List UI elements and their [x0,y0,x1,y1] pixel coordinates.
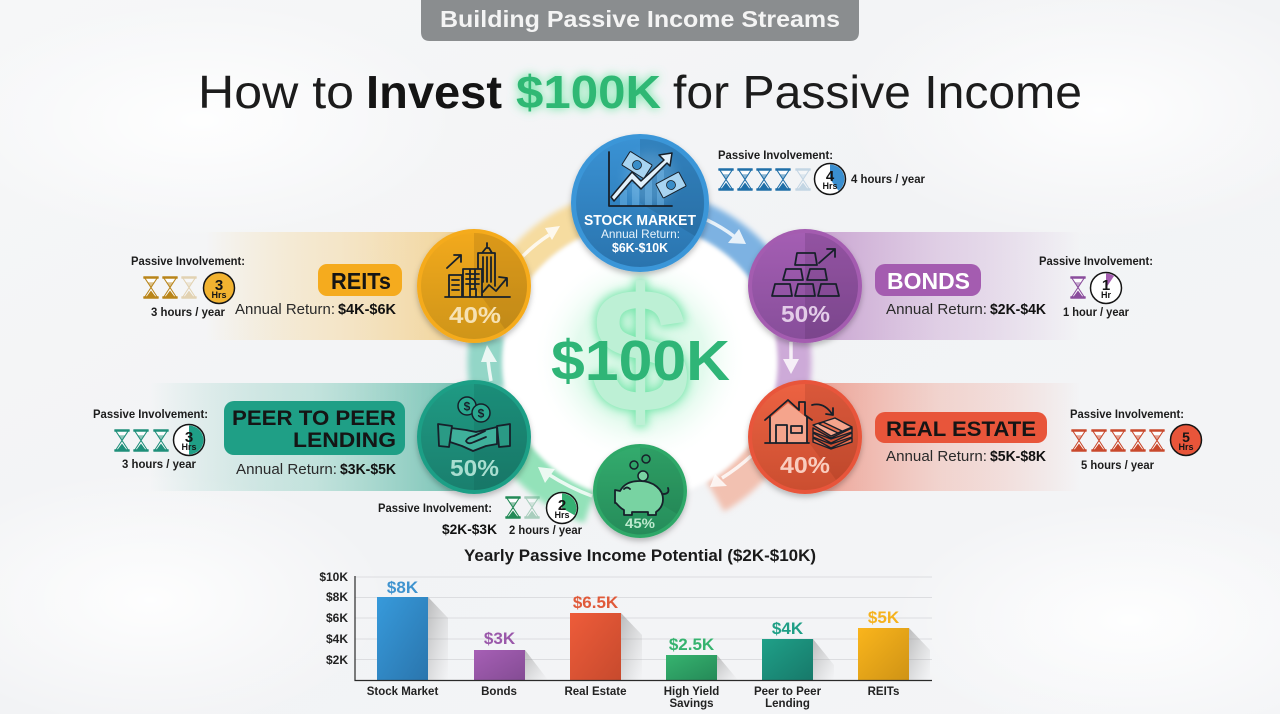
annual return: REITs: Annual Return: [235,301,335,318]
bar chart [319,570,932,710]
title: for Passive Income [673,66,1082,118]
y axis labels: $4K [326,632,348,646]
bar: Bonds $3K [474,629,548,698]
central white disc [503,225,777,499]
badge: REITs: REITs [331,268,391,294]
icon: hourglass [1070,276,1086,299]
title: Invest [366,66,502,118]
bar: Real Estate $6.5K [564,593,642,698]
annual return: bonds: $2K-$4K [990,301,1046,318]
icon: clock 3 hrs [204,272,234,304]
node: High Yield Savings [593,444,687,538]
badge: Peer to Peer Lending [224,401,405,455]
y axis labels: $10K [319,570,348,584]
arrow: peer to peer to REITs [481,345,497,381]
annual return: bonds: Annual Return: [886,301,987,318]
bar: High Yield Savings $2.5K: $2.5K [669,635,715,654]
bar: Peer to Peer Lending $4K [754,619,834,710]
chart title: Yearly Passive Income Potential ($2K-$10K) [464,547,816,565]
icon: handshake with coins [438,397,510,451]
real estate passive involvement [1070,407,1202,472]
icon: piggy bank [615,455,668,515]
annual return: peer to peer [236,461,396,478]
peer to peer text block [224,401,405,478]
stock passive involvement: Passive Involvement: [718,148,833,162]
value: 50%: 50% [450,455,499,481]
y axis labels: $2K [326,653,348,667]
annual return: peer to peer: $3K-$5K [340,461,396,478]
icon: hourglasses [114,429,169,452]
icon: clock 4 hrs: Hrs [822,181,838,191]
icon: clock 1 hr: Hr [1101,290,1111,300]
icon: clock 5 hrs [1170,424,1202,456]
label: stock annual return: Annual Return: [601,227,680,241]
peer to peer passive involvement [93,407,208,471]
arrow: savings to peer to peer [538,467,592,496]
icon: stock chart with banknotes [609,151,686,206]
savings passive involvement: Passive Involvement: [378,501,492,515]
title [198,66,1082,118]
bar: REITs $5K: $5K [868,608,900,627]
flow arrows [481,220,799,496]
value: 45%: 45% [625,515,656,531]
icon: clock 5 hrs: 5 [1182,429,1190,445]
bonds text block [875,264,1046,318]
icon: clock 2 hrs: Hrs [554,510,570,520]
bonds passive involvement [1039,254,1153,319]
value: 40%: 40% [449,302,501,328]
badge: REITs [318,264,402,296]
value: stock annual return: $6K-$10K [612,241,668,255]
badge: Real Estate: REAL ESTATE [886,417,1036,441]
icon: clock 1 hr [1090,272,1122,304]
badge: Peer to Peer Lending: PEER TO PEER [232,406,396,430]
badge: Real Estate [875,412,1047,443]
annual return: REITs: $4K-$6K [338,301,396,318]
bar: Stock Market $8K: Stock Market [367,686,438,698]
bar: Peer to Peer Lending $4K: Lending [765,698,810,710]
y axis labels: $8K [326,590,348,604]
icon: clock 2 hrs: 2 [558,497,566,514]
panel band: Peer to Peer Lending [150,383,475,491]
real estate passive involvement: Passive Involvement: [1070,407,1184,421]
real estate passive involvement: 5 hours / year [1081,458,1154,472]
value: 50%: 50% [781,301,830,327]
bar: Real Estate $6.5K: $6.5K [573,593,619,612]
node: Stock Market [571,134,709,272]
icon: hourglasses [143,276,197,299]
icon: clock 3 hrs: 3 [215,277,223,294]
title: How to [198,66,354,118]
peer to peer passive involvement: 3 hours / year [122,457,196,471]
annual return: real estate: $5K-$8K [990,448,1046,465]
icon: house and cash stack [765,400,852,449]
bonds passive involvement: 1 hour / year [1063,305,1129,319]
icon: clock 5 hrs: Hrs [1178,442,1194,452]
savings passive involvement: 2 hours / year [509,523,582,537]
badge: Bonds [875,264,981,296]
badge: Bonds: BONDS [887,268,970,294]
bar: Real Estate $6.5K: Real Estate [564,686,627,698]
REITs passive involvement: Passive Involvement: [131,254,245,268]
stock passive involvement [718,148,925,194]
big dollar sign: $ [590,251,690,450]
central amount: $100K [551,329,730,393]
bar: High Yield Savings $2.5K [664,635,738,710]
bar: Bonds $3K: $3K [484,629,516,648]
icon: clock 2 hrs [546,492,578,524]
big dollar sign: $ [590,251,690,450]
bar: Stock Market $8K [367,578,448,698]
y axis labels [319,570,348,667]
node: Bonds [748,229,862,343]
savings passive involvement [378,492,582,537]
panel band: REITs [205,232,475,340]
value: 40%: 40% [780,452,830,478]
badge: Building Passive Income Streams [421,0,859,41]
icon: city buildings with growth arrow [445,243,510,297]
annual return: bonds [886,301,1046,318]
label: stock market: STOCK MARKET [584,213,696,229]
icon: clock 3 hrs: Hrs [211,290,227,300]
annual return: real estate: Annual Return: [886,448,987,465]
panel band: Bonds [805,232,1080,340]
panel band: Real Estate [805,383,1080,491]
bar: Bonds $3K: Bonds [481,686,517,698]
arrow: real estate to savings [710,456,751,487]
REITs passive involvement: 3 hours / year [151,305,225,319]
arrow: REITs to stock [523,226,560,256]
icon: gold bars with arrow [772,249,839,296]
value: savings annual return: $2K-$3K [442,521,497,537]
bar: REITs $5K [858,608,930,698]
node: Peer to Peer Lending [417,380,531,494]
node: Real Estate [748,380,862,494]
arrow: bonds to real estate [783,342,799,374]
icon: clock 4 hrs: 4 [826,168,835,185]
icon: clock 4 hrs [814,164,846,194]
stock passive involvement: 4 hours / year [851,172,925,186]
real estate text block [875,412,1047,465]
bar: Peer to Peer Lending $4K: $4K [772,619,804,638]
ring of coloured flow arcs [486,216,793,506]
icon: clock 3 hrs: 3 [185,429,193,446]
icon: hourglasses [505,496,540,519]
icon: handshake with coins: $ [464,400,471,414]
icon: clock 1 hr: 1 [1102,277,1110,294]
badge: Building Passive Income Streams: Building Passive Income Streams [440,6,840,32]
bar: Stock Market $8K: $8K [387,578,419,597]
icon: handshake with coins: $ [478,406,485,420]
annual return: real estate [886,448,1046,465]
icon: clock 3 hrs [174,424,204,456]
icon: hourglasses [718,168,811,191]
REITs passive involvement [131,254,245,319]
badge: Peer to Peer Lending: LENDING [293,428,396,452]
icon: hourglasses [1071,429,1165,452]
annual return: peer to peer: Annual Return: [236,461,337,478]
central glow [532,250,748,466]
bar: REITs $5K: REITs [868,686,899,698]
title: $100K [516,66,661,118]
node: REITs [417,229,531,343]
bar: High Yield Savings $2.5K: High Yield [664,686,719,698]
annual return: REITs [235,301,396,318]
bonds passive involvement: Passive Involvement: [1039,254,1153,268]
arrow: stock to bonds [707,220,746,244]
title: $100K [516,66,661,118]
peer to peer passive involvement: Passive Involvement: [93,407,208,421]
REITs text block [235,264,402,318]
y axis labels: $6K [326,611,348,625]
bar: Peer to Peer Lending $4K: Peer to Peer [754,686,822,698]
bar: High Yield Savings $2.5K: Savings [669,698,714,710]
icon: clock 3 hrs: Hrs [181,442,197,452]
